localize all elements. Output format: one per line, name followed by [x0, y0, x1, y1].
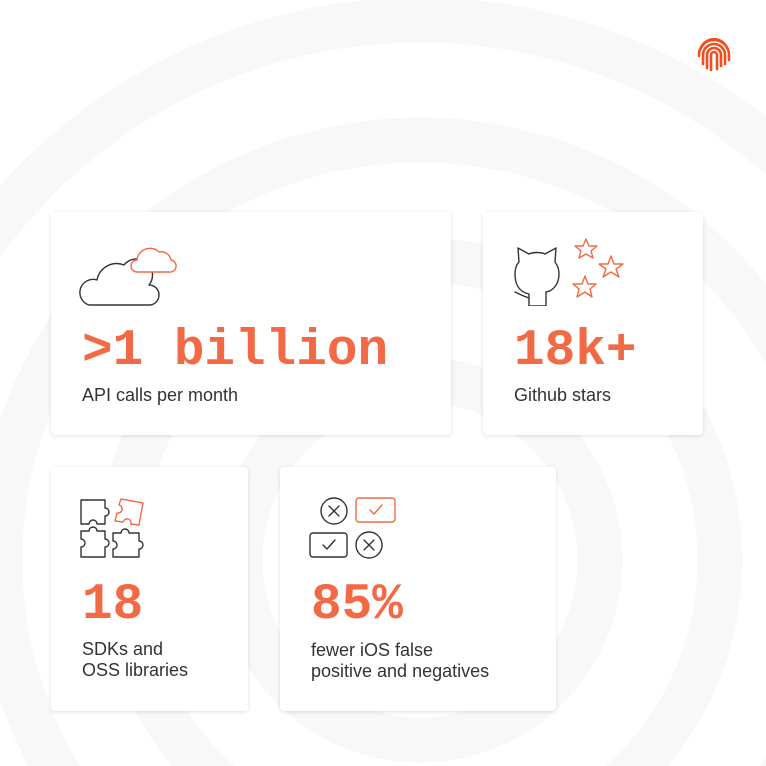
label: fewer iOS false: [311, 640, 433, 660]
icon: clouds: [79, 248, 177, 306]
icon: puzzle pieces: [80, 498, 144, 558]
card: ios accuracy: [280, 467, 556, 711]
icon: octocat and stars: [514, 238, 624, 306]
icon: checks and crosses: [309, 497, 396, 559]
label: API calls per month: [82, 385, 238, 405]
label: positive and negatives: [311, 661, 489, 681]
card: api calls: [51, 212, 451, 435]
label: OSS libraries: [82, 660, 188, 680]
number: >1 billion: [82, 323, 388, 380]
label: [82, 639, 188, 680]
number: 85%: [311, 577, 403, 634]
number: 18: [82, 577, 143, 634]
label: Github stars: [514, 385, 611, 405]
logo: fingerprint: [698, 38, 730, 72]
number: 18k+: [514, 323, 636, 380]
label: [311, 640, 489, 681]
card: sdks: [51, 467, 248, 711]
label: SDKs and: [82, 639, 163, 659]
card: github stars: [483, 212, 703, 435]
